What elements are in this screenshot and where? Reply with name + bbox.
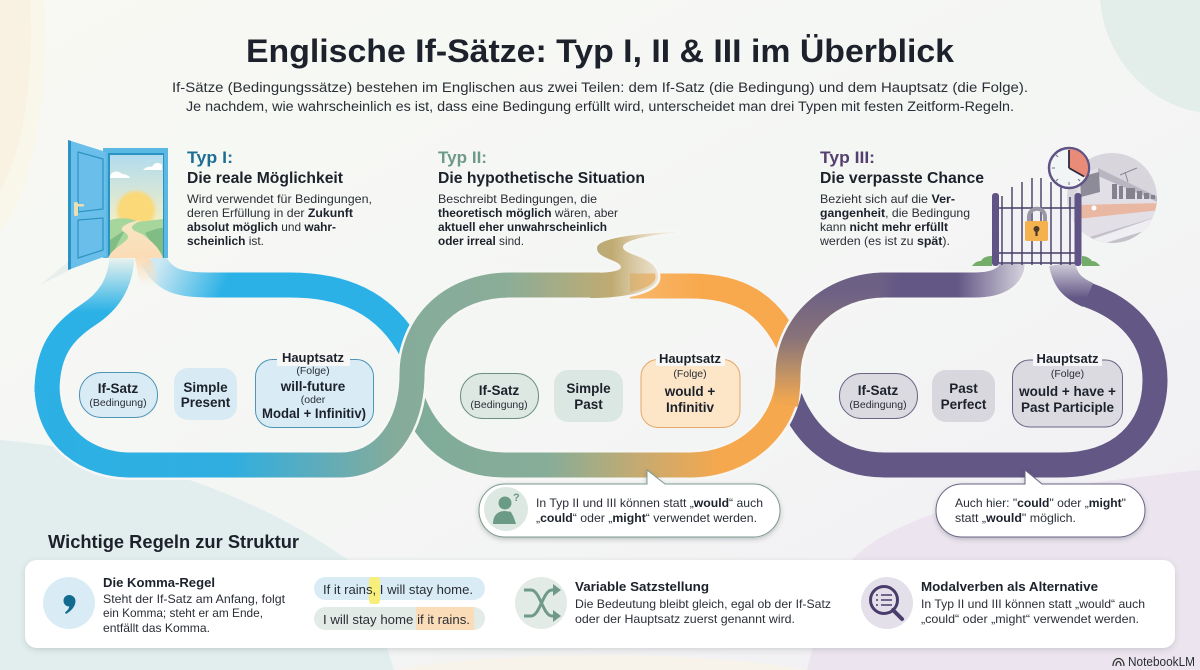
panel: rules	[25, 560, 1175, 648]
icon: magnifier	[861, 577, 913, 629]
description: Typ I	[187, 192, 372, 248]
rule: Komma: entfällt das Komma.	[103, 621, 210, 635]
callout: Typ III hint	[936, 470, 1145, 537]
icon: comma	[43, 577, 95, 629]
description: Typ II: oder irreal sind.	[438, 234, 524, 248]
panel: Typ II	[438, 148, 645, 248]
pill: Hauptsatz: would +	[664, 384, 715, 399]
callout: Typ II hint	[479, 470, 780, 537]
pill: If-Satz: If-Satz	[479, 383, 520, 398]
icon: person with question: ?	[513, 492, 520, 504]
pill: Hauptsatz	[256, 350, 374, 428]
description: Typ III	[819, 192, 970, 248]
heading: rules: Wichtige Regeln zur Struktur	[48, 532, 299, 552]
callout: Typ III hint: Auch hier: "could" oder „might"	[955, 496, 1126, 510]
pill: Hauptsatz	[641, 351, 740, 428]
formula: Typ III	[840, 351, 1122, 427]
pill: Simple Present: Simple	[183, 380, 228, 395]
callout: Typ III hint: statt „would" möglich.	[955, 511, 1076, 525]
pill: Simple Past: Past	[574, 397, 603, 412]
callout: Typ II hint: „could“ oder „might“ verwendet werden.	[536, 511, 757, 525]
pill: Hauptsatz: Hauptsatz	[659, 351, 722, 366]
description: Typ I: scheinlich ist.	[187, 234, 264, 248]
heading: Typ II: Typ II:	[438, 148, 487, 167]
pill: Hauptsatz: Past Participle	[1021, 400, 1115, 415]
example sentences: If it rains, I will stay home.	[323, 582, 473, 597]
pill: Hauptsatz: will-future	[280, 379, 346, 394]
clock	[1049, 148, 1089, 188]
panel: Typ III	[819, 148, 984, 248]
formula: Typ I	[80, 350, 374, 428]
pill: Hauptsatz: (Folge)	[1051, 368, 1084, 380]
pill: Hauptsatz: (Folge)	[673, 368, 707, 380]
intro text: If-Sätze (Bedingungssätze) bestehen im Englischen aus zwei Teilen: dem If-Satz (die Bedingung) und dem Hauptsatz (die Folge).	[172, 80, 1028, 95]
pill: If-Satz: (Bedingung)	[849, 399, 907, 411]
gate	[972, 256, 1100, 266]
rule: Modalverben	[861, 577, 1145, 629]
subheading: Typ III: Die verpasste Chance	[820, 170, 984, 187]
pill: If-Satz	[460, 374, 538, 418]
heading: Typ III: Typ III:	[820, 148, 875, 167]
pill: Hauptsatz: Infinitiv	[666, 400, 714, 415]
rule: Modalverben: Modalverben als Alternative	[921, 579, 1098, 594]
formula: Typ II	[460, 351, 740, 428]
ribbon: blue loop to green and winding road	[47, 232, 680, 465]
flow ribbons	[47, 232, 1155, 465]
pill: Simple Past	[554, 370, 623, 422]
pill: Hauptsatz	[1012, 351, 1122, 427]
example sentences	[314, 577, 485, 630]
rule: Satzstellung: Die Bedeutung bleibt gleich, egal ob der If-Satz	[575, 597, 831, 611]
rule: Komma: ein Komma; steht er am Ende,	[103, 606, 263, 620]
description: Typ III: Bezieht sich auf die Ver-	[820, 192, 955, 206]
rule: Modalverben: „could“ oder „might“ verwendet werden.	[921, 612, 1139, 626]
pill: If-Satz: If-Satz	[858, 383, 898, 398]
padlock	[1029, 209, 1045, 224]
description: Typ II: Beschreibt Bedingungen, die	[438, 192, 597, 206]
intro text: Je nachdem, wie wahrscheinlich es ist, dass eine Bedingung erfüllt wird, unterscheidet man drei Typen mit festen Zeitform-Regeln.	[186, 99, 1014, 114]
rule: Satzstellung: oder der Hauptsatz zuerst genannt wird.	[575, 612, 795, 626]
pill: If-Satz: (Bedingung)	[89, 397, 147, 409]
description: Typ III: werden (es ist zu spät).	[819, 234, 950, 248]
rule: Komma: Die Komma-Regel	[103, 575, 215, 590]
pill: Hauptsatz: Hauptsatz	[1036, 351, 1099, 366]
panel: Typ I	[187, 148, 372, 248]
subheading: Typ I: Die reale Möglichkeit	[187, 170, 344, 187]
title: Englische If-Sätze: Typ I, II & III im Überblick	[246, 33, 954, 69]
icon: shuffle	[515, 577, 567, 629]
rule: Modalverben: In Typ II und III können statt „would“ auch	[921, 597, 1145, 611]
pill: Hauptsatz: (oder	[301, 394, 326, 406]
intro text	[172, 80, 1028, 114]
rule: Satzstellung: Variable Satzstellung	[575, 579, 709, 594]
ribbon: orange top band	[630, 286, 792, 352]
rule: Satzstellung	[515, 577, 831, 629]
description: Typ II	[438, 192, 618, 248]
ribbon: purple lower loop	[790, 264, 1155, 465]
pill: If-Satz	[80, 372, 158, 418]
pill: If-Satz	[840, 374, 918, 418]
pill: Past Perfect: Perfect	[941, 397, 987, 412]
pill: If-Satz: (Bedingung)	[470, 399, 528, 411]
pill: Simple Past: Simple	[566, 381, 611, 396]
icon: open door with sunrise	[40, 140, 168, 285]
ribbon: green to orange to purple	[412, 264, 1012, 465]
pill: Past Perfect: Past	[949, 381, 978, 396]
description: Typ III: kann nicht mehr erfüllt	[820, 220, 948, 234]
description: Typ III: gangenheit, die Bedingung	[820, 206, 970, 220]
pill: Hauptsatz: (Folge)	[296, 365, 330, 377]
description: Typ I: absolut möglich und wahr-	[187, 220, 336, 234]
callout: Typ II hint: In Typ II und III können statt „would“ auch	[536, 496, 763, 510]
rule: Komma	[43, 575, 286, 635]
logo: NotebookLM: NotebookLM	[1128, 655, 1195, 669]
icon: person with question	[484, 487, 528, 531]
icon: locked gate with clock and train	[972, 148, 1160, 266]
pill: If-Satz: If-Satz	[98, 381, 138, 396]
description: Typ I: Wird verwendet für Bedingungen,	[187, 192, 372, 206]
pill: Simple Present: Present	[181, 395, 231, 410]
subheading: Typ II: Die hypothetische Situation	[438, 170, 645, 187]
ribbon: blue top band	[152, 258, 412, 352]
example sentences: I will stay home if it rains.	[323, 612, 470, 627]
pill: Simple Present	[174, 368, 237, 420]
heading: Typ I: Typ I:	[187, 148, 233, 167]
pill: Past Perfect	[932, 370, 995, 422]
pill: Hauptsatz: Hauptsatz	[282, 350, 345, 365]
description: Typ II: aktuell eher unwahrscheinlich	[438, 220, 607, 234]
pill: Hauptsatz: would + have +	[1018, 384, 1116, 399]
train circle	[1067, 153, 1157, 243]
rule: Komma: Steht der If-Satz am Anfang, folgt	[103, 592, 286, 606]
pill: Hauptsatz: Modal + Infinitiv)	[262, 406, 366, 421]
description: Typ II: theoretisch möglich wären, aber	[438, 206, 618, 220]
description: Typ I: deren Erfüllung in der Zukunft	[187, 206, 353, 220]
